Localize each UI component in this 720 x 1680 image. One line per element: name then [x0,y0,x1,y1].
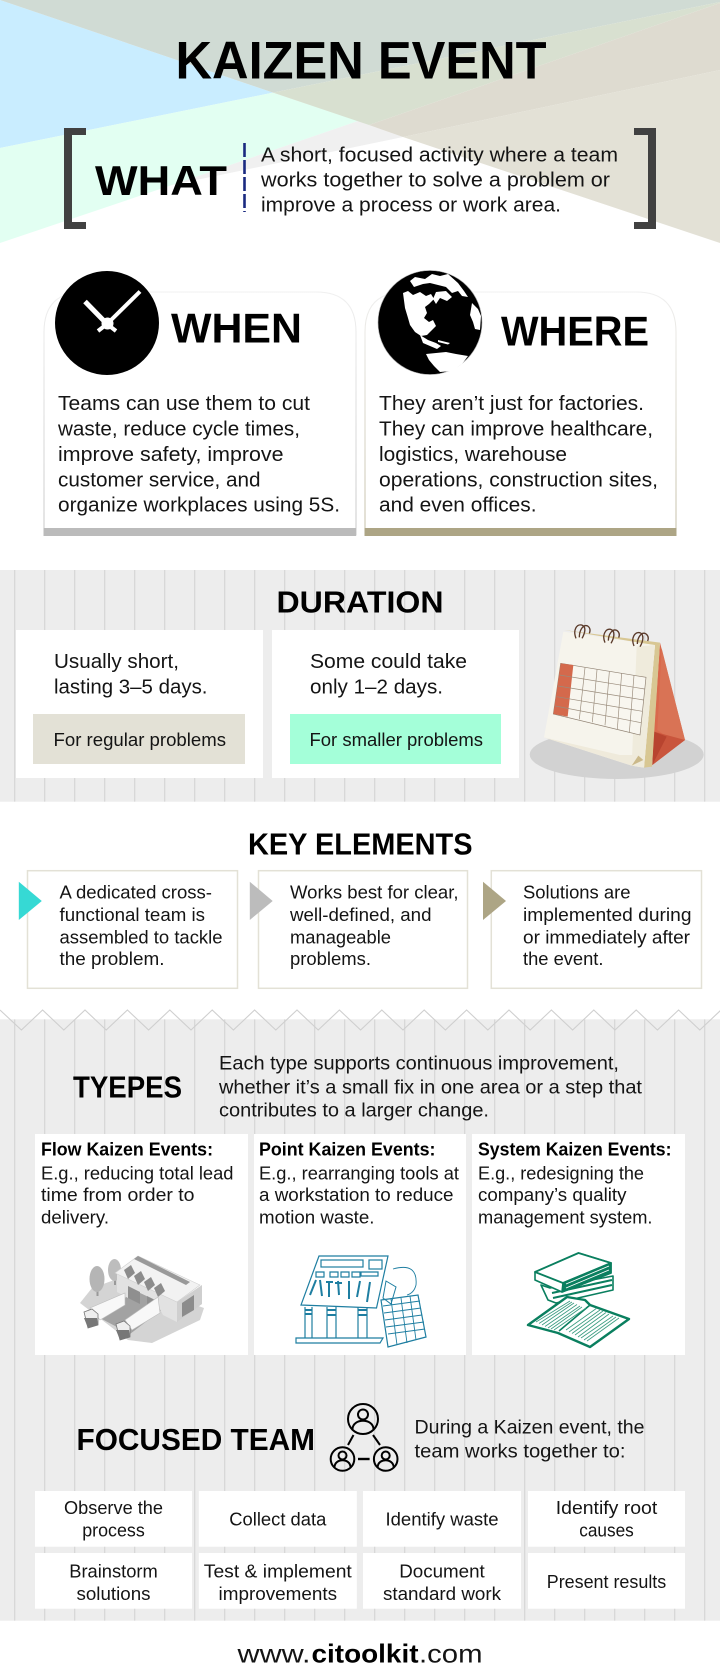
activity: brainstorm solutions: Brainstorm [69,1560,158,1581]
activity: identify root causes: causes [579,1520,634,1541]
panel: system kaizen events [472,1134,685,1355]
types description [218,1053,643,1122]
types description: whether it’s a small fix in one area or a step that [218,1077,643,1098]
focused team description: During a Kaizen event, the [414,1417,644,1438]
what description [260,144,618,217]
activity: document standard work: standard work [383,1583,502,1604]
icon: globe [378,270,482,374]
activity: observe the process: Observe the [64,1497,163,1518]
when description [57,392,340,517]
focused team description: team works together to: [414,1441,626,1462]
what description: improve a process or work area. [261,194,561,217]
card accent bar [364,528,676,536]
panel: system kaizen events: company’s quality [478,1184,627,1205]
icon: tool board with checklist [296,1256,426,1347]
key element 3 text: the event. [523,948,604,969]
key element 1 text: the problem. [60,948,164,969]
key element 3 [483,871,702,988]
when description: waste, reduce cycle times, [57,418,300,440]
heading: key elements: KEY ELEMENTS [248,826,472,861]
heading: duration: DURATION [276,585,444,620]
dashed divider [243,143,246,212]
card: smaller: Some could take [310,650,467,673]
types description: contributes to a larger change. [219,1101,489,1122]
icon: team network [331,1404,398,1471]
key element 1 text: assembled to tackle [60,926,222,947]
activity: document standard work: Document [399,1560,485,1581]
activity: document standard work [363,1553,521,1609]
panel: system kaizen events: System Kaizen Events: [478,1139,672,1160]
activity: present results [528,1553,685,1609]
heading: what: WHAT [95,157,227,204]
icon: stacked and open books [528,1253,629,1347]
when description: improve safety, improve [58,443,284,466]
heading: focused team: FOCUSED TEAM [76,1422,315,1457]
where description: They aren’t just for factories. [379,392,644,415]
icon: factory with trucks [80,1256,204,1343]
heading: types: TYEPES [73,1070,182,1105]
bracket: right [634,128,656,229]
background: geometric header shapes [0,0,720,243]
where description [379,392,658,517]
key element 2 text: well-defined, and [289,904,432,925]
card: smaller [272,630,519,778]
panel: point kaizen events: a workstation to reduce [259,1184,454,1205]
panel: flow kaizen events: delivery. [41,1206,109,1227]
panel: point kaizen events: Point Kaizen Events: [259,1139,436,1160]
key element 2 text: manageable [290,926,391,947]
panel: flow kaizen events [35,1134,248,1355]
key element 1 [19,871,237,988]
icon: desk calendar [530,625,704,779]
card: regular [16,630,263,778]
tag: smaller problems [290,714,501,764]
what description: A short, focused activity where a team [261,144,618,167]
focused team description [414,1417,644,1462]
footer: website: www. [236,1638,310,1668]
activity: test and implement improvements [199,1553,357,1609]
key element 3 text: implemented during [523,904,692,925]
activity: identify root causes [528,1491,685,1547]
panel: flow kaizen events: time from order to [41,1184,194,1205]
card background [44,292,356,535]
tag: regular problems [33,714,245,764]
activity: collect data [199,1491,357,1547]
footer: website [236,1638,482,1668]
where description: operations, construction sites, [379,468,658,492]
activity: observe the process [35,1491,192,1547]
panel: where [364,270,676,536]
where description: They can improve healthcare, [379,418,653,440]
key element 2 text: problems. [290,948,371,969]
icon: clock [55,271,159,375]
footer: website: citoolkit [312,1638,419,1668]
key element 3 text: or immediately after [523,926,690,947]
activity: observe the process: process [82,1520,145,1541]
key element 1 text: functional team is [60,904,205,925]
key element 2 [250,871,468,988]
key element 1 text: A dedicated cross- [60,881,212,902]
key element 3 text [523,881,692,969]
where description: logistics, warehouse [379,443,567,466]
heading: when: WHEN [171,305,302,352]
card: regular: Usually short, [54,650,179,673]
panel: what [64,128,656,229]
arrow: tan [483,882,506,920]
activity: brainstorm solutions: solutions [76,1583,150,1604]
panel: flow kaizen events: E.g., reducing total lead [41,1162,234,1183]
panel: point kaizen events: E.g., rearranging tools at [259,1162,459,1183]
panel: point kaizen events: motion waste. [259,1206,374,1227]
panel: duration [0,570,720,802]
where description: and even offices. [379,494,536,517]
panel: when [44,271,356,536]
when description: customer service, and [58,468,260,492]
card: smaller: only 1–2 days. [310,675,443,698]
activity: identify waste [363,1491,521,1547]
card: regular: lasting 3–5 days. [54,675,208,698]
what description: works together to solve a problem or [260,169,610,192]
key element 3 text: Solutions are [523,881,630,902]
title: KAIZEN EVENT [176,32,546,91]
card: smaller: For smaller problems [310,729,483,750]
when description: organize workplaces using 5S. [58,494,340,517]
activity: test and implement improvements: improvements [219,1583,337,1604]
bracket: left [64,128,86,229]
activity: brainstorm solutions [35,1553,192,1609]
key element 1 text [60,881,222,969]
key element 2 text: Works best for clear, [290,881,458,902]
types description: Each type supports continuous improvement, [219,1053,619,1074]
panel: system kaizen events: E.g., redesigning the [478,1162,644,1183]
when description: Teams can use them to cut [58,392,310,415]
panel: flow kaizen events: Flow Kaizen Events: [41,1139,213,1160]
card: regular: For regular problems [54,729,226,750]
activity: test and implement improvements: Test & implement [204,1560,352,1581]
arrow: teal [19,882,42,920]
arrow: grey [250,882,273,920]
activity: identify root causes: Identify root [556,1497,657,1518]
footer: website: .com [419,1638,482,1668]
card background [365,292,676,535]
card accent bar [44,528,356,536]
activity: present results: Present results [547,1571,666,1592]
activity: identify waste: Identify waste [386,1508,498,1529]
panel: lower grey section [0,1010,720,1621]
heading: where: WHERE [501,308,649,355]
activity: collect data: Collect data [229,1508,327,1529]
panel: point kaizen events [254,1134,466,1355]
key element 2 text [289,881,458,969]
panel: system kaizen events: management system. [478,1206,652,1227]
